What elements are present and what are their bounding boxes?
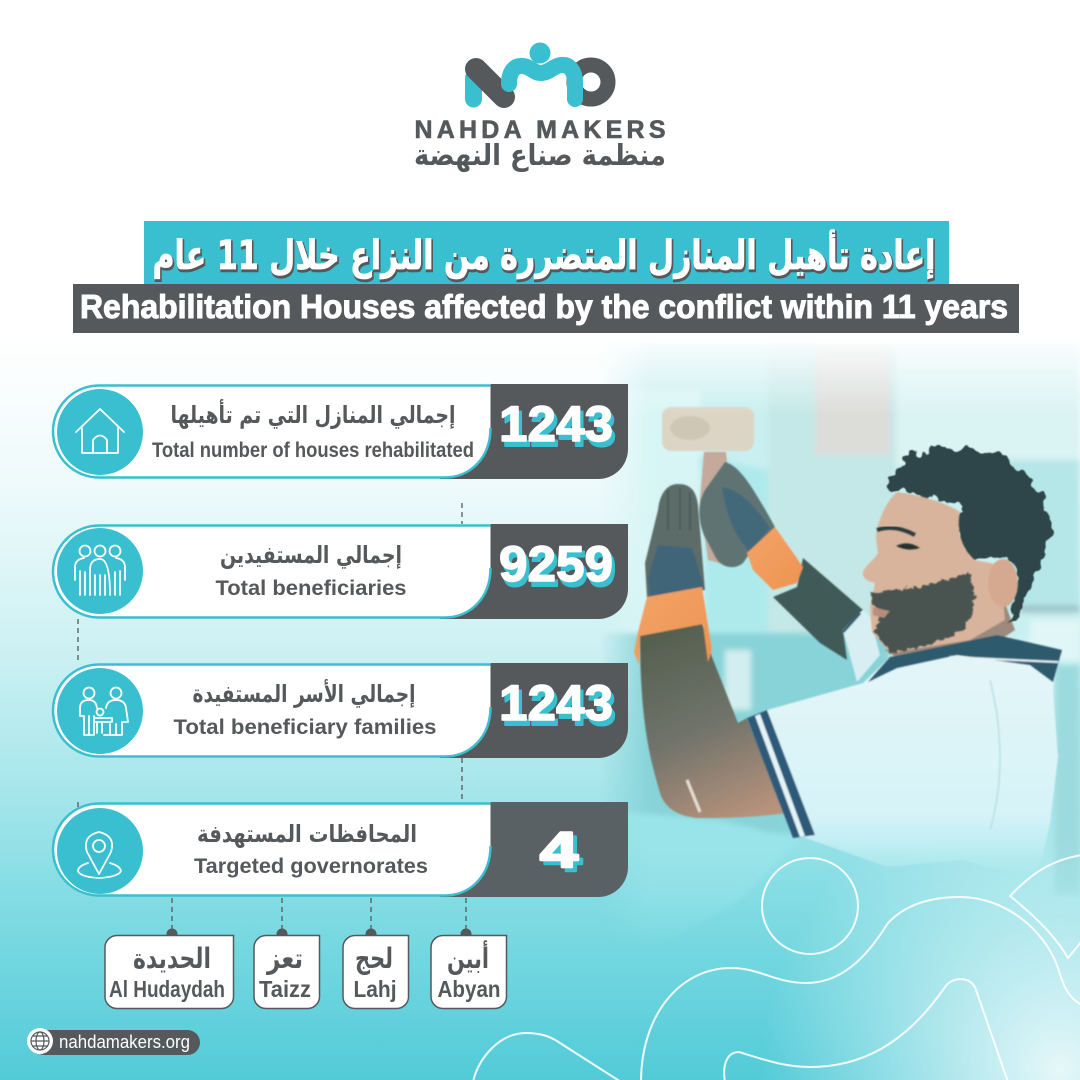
- worker's neck and collar: [868, 606, 1063, 683]
- panel: targeted governorates: [53, 802, 628, 897]
- value: [540, 822, 582, 882]
- chip: Abyan: [431, 936, 507, 1008]
- logo mark: [474, 42, 608, 99]
- worker's head: [863, 445, 1053, 653]
- value: 1243: [502, 680, 616, 736]
- title: Arabic heading band: [144, 221, 949, 285]
- label: [194, 820, 428, 878]
- label: Total beneficiary families: [174, 716, 436, 739]
- ear: [988, 559, 1018, 607]
- icon: group of people: [57, 528, 143, 614]
- label: [152, 399, 474, 462]
- label: [174, 679, 436, 739]
- label: إجمالي الأسر المستفيدة: [192, 679, 416, 708]
- dashed connectors between cards: [78, 503, 462, 812]
- photo: worker hammering a wall: [606, 346, 1080, 912]
- website badge: [27, 1028, 200, 1055]
- chip: Taizz: تعز: [265, 942, 303, 975]
- chip: Al Hudaydah: [105, 936, 234, 1008]
- label: Total number of houses rehabilitated: [152, 439, 474, 462]
- chip: Lahj: لحج: [355, 942, 393, 975]
- label: إجمالي المستفيدين: [220, 541, 402, 569]
- value: 1243: [499, 396, 613, 452]
- value: 4: [540, 822, 578, 878]
- value: 4: [544, 826, 582, 882]
- face: [863, 492, 1005, 653]
- panel: total houses rehabilitated: [53, 384, 628, 479]
- icon: house: [57, 389, 143, 475]
- chip: Lahj: Lahj: [354, 976, 396, 1002]
- eye and brow: [877, 528, 920, 550]
- chip: Taizz: Taizz: [259, 976, 311, 1002]
- title: English heading band: Rehabilitation Houses affected by the conflict within 11 years: [80, 288, 1008, 325]
- worker's arm and hand on the wall: [634, 484, 787, 818]
- photo backdrop: wall and column: [606, 346, 1080, 912]
- beard: [872, 573, 975, 653]
- icon: family: [57, 668, 143, 754]
- label: [216, 541, 406, 600]
- chip: Abyan: Abyan: [438, 976, 500, 1002]
- logo: Nahda Makers: [414, 42, 666, 172]
- icon: map pin: [57, 808, 143, 894]
- chip: Taizz: [254, 936, 320, 1008]
- value: 9259: [502, 541, 616, 597]
- chip: Abyan: أبين: [447, 940, 489, 975]
- chip: Lahj: [343, 936, 409, 1008]
- label: المحافظات المستهدفة: [197, 820, 417, 848]
- label: Total beneficiaries: [216, 577, 406, 600]
- worker's shirt: [747, 610, 1058, 880]
- logo Arabic name: منظمة صناع النهضة: [414, 138, 666, 172]
- mallet: [662, 407, 754, 566]
- decorative white outline shapes: [473, 855, 1080, 1080]
- panel: total beneficiary families: [53, 663, 628, 758]
- label: إجمالي المنازل التي تم تأهيلها: [170, 399, 456, 429]
- governorate connectors: [166, 898, 472, 940]
- value: 1243: [499, 675, 613, 731]
- chip: Al Hudaydah: Al Hudaydah: [109, 976, 225, 1002]
- label: Targeted governorates: [194, 855, 428, 878]
- value: 9259: [499, 536, 613, 592]
- value: 1243: [502, 401, 616, 457]
- hair: [886, 445, 1053, 625]
- chip: Al Hudaydah: الحديدة: [133, 942, 211, 975]
- website badge: nahdamakers.org: [59, 1032, 190, 1052]
- icon: globe: [31, 1032, 49, 1050]
- lips: [873, 607, 890, 618]
- panel: total beneficiaries: [53, 524, 628, 619]
- worker's other hand and forearm: [699, 462, 863, 660]
- logo English name: NAHDA MAKERS: [414, 116, 666, 144]
